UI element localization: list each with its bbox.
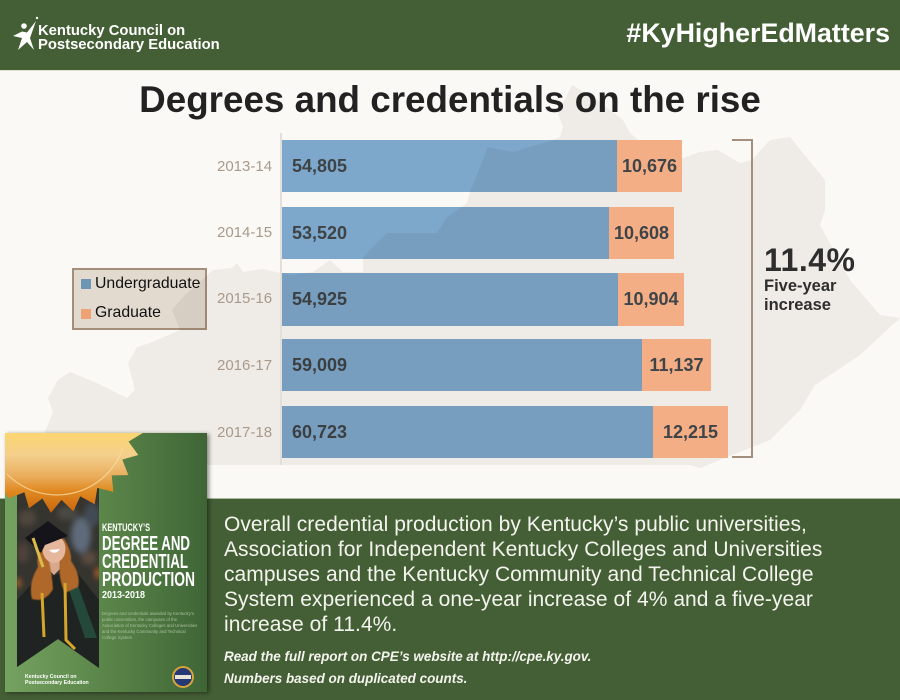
bracket xyxy=(732,139,753,458)
header bar xyxy=(0,0,900,71)
summary paragraph: increase of 11.4%. xyxy=(224,613,397,636)
bar 2016-17 xyxy=(282,339,711,391)
year label 2017-18: 2017-18 xyxy=(217,424,272,441)
legend xyxy=(72,268,207,330)
report note: Numbers based on duplicated counts. xyxy=(224,671,467,686)
cover logo: Postsecondary Education xyxy=(25,680,89,686)
summary paragraph xyxy=(224,513,822,636)
callout: five-year increase xyxy=(764,242,855,314)
bar 2013-14: 10,676 xyxy=(622,156,677,176)
graduate face xyxy=(42,538,66,563)
cover background xyxy=(5,433,207,692)
bar 2015-16: 54,925 xyxy=(292,289,347,309)
bar 2013-14: 54,805 xyxy=(292,156,347,176)
cover title: CREDENTIAL xyxy=(102,550,188,573)
bar 2017-18 xyxy=(282,406,728,458)
bar 2013-14 xyxy=(282,140,682,192)
gown stoles xyxy=(42,583,75,649)
gold seal xyxy=(5,433,143,513)
year label 2015-16: 2015-16 xyxy=(217,290,272,307)
cover years: 2013-2018 xyxy=(102,590,145,601)
graduate smile xyxy=(49,549,60,553)
summary paragraph: campuses and the Kentucky Community and Technical College xyxy=(224,563,814,586)
logo icon xyxy=(13,16,38,50)
bar 2016-17: 11,137 xyxy=(649,355,704,375)
cover description: Association of Kentucky Colleges and Universities xyxy=(102,623,197,628)
cover description: public universities, the campuses of the xyxy=(102,617,178,622)
legend label graduate: Graduate xyxy=(95,304,161,321)
callout number: 11.4% xyxy=(764,242,855,278)
callout label: increase xyxy=(764,296,831,314)
bar 2014-15: 10,608 xyxy=(614,223,669,243)
logo text: Postsecondary Education xyxy=(38,37,220,53)
cover description: and the Kentucky Community and Technical xyxy=(102,629,186,634)
bar 2014-15 xyxy=(282,207,674,259)
year label 2016-17: 2016-17 xyxy=(217,357,272,374)
cover description: Degrees and credentials awarded by Kentucky’s xyxy=(102,611,194,616)
cover heading: KENTUCKY’S xyxy=(102,522,150,534)
year label 2014-15: 2014-15 xyxy=(217,224,272,241)
cover photo ribbon xyxy=(15,483,101,673)
cap tassel xyxy=(33,538,43,567)
graduate hair right lock xyxy=(60,537,79,593)
bar 2015-16 xyxy=(282,273,684,326)
footer panel xyxy=(0,498,900,700)
cover description: College System xyxy=(102,635,133,640)
bar 2017-18: 12,215 xyxy=(663,422,718,442)
report cover xyxy=(4,431,212,695)
graduate hair left lock xyxy=(30,550,54,600)
summary paragraph: Overall credential production by Kentucky’s public universities, xyxy=(224,513,807,536)
graduate neck xyxy=(48,560,60,575)
graduation cap xyxy=(25,521,68,553)
graduate gown xyxy=(17,570,99,673)
chart axis line xyxy=(280,133,282,465)
year label 2013-14: 2013-14 xyxy=(217,158,272,175)
bar 2017-18: 60,723 xyxy=(292,422,347,442)
cover title: PRODUCTION xyxy=(102,568,195,591)
bar 2015-16: 10,904 xyxy=(623,289,679,309)
background map of Kentucky xyxy=(45,85,900,468)
cover badge xyxy=(172,666,194,688)
bar 2016-17: 59,009 xyxy=(292,355,347,375)
summary paragraph: Association for Independent Kentucky Colleges and Universities xyxy=(224,538,822,561)
bar 2014-15: 53,520 xyxy=(292,223,347,243)
legend swatch graduate xyxy=(81,309,91,319)
callout label xyxy=(764,277,836,314)
summary paragraph: System experienced a one-year increase of 4% and a five-year xyxy=(224,588,813,611)
cover logo: Kentucky Council on xyxy=(25,674,77,680)
logo text: Kentucky Council on xyxy=(38,23,185,39)
report note: Read the full report on CPE’s website at http://cpe.ky.gov. xyxy=(224,649,591,664)
cover title: DEGREE AND xyxy=(102,532,190,555)
legend swatch undergraduate xyxy=(81,279,91,289)
logo text xyxy=(38,23,220,53)
legend label undergraduate: Undergraduate xyxy=(95,275,200,292)
report note xyxy=(224,649,591,686)
callout label: Five-year xyxy=(764,277,836,295)
title: Degrees and credentials on the rise xyxy=(139,79,761,120)
hashtag: #KyHigherEdMatters xyxy=(626,18,890,48)
gown hood xyxy=(70,586,97,638)
